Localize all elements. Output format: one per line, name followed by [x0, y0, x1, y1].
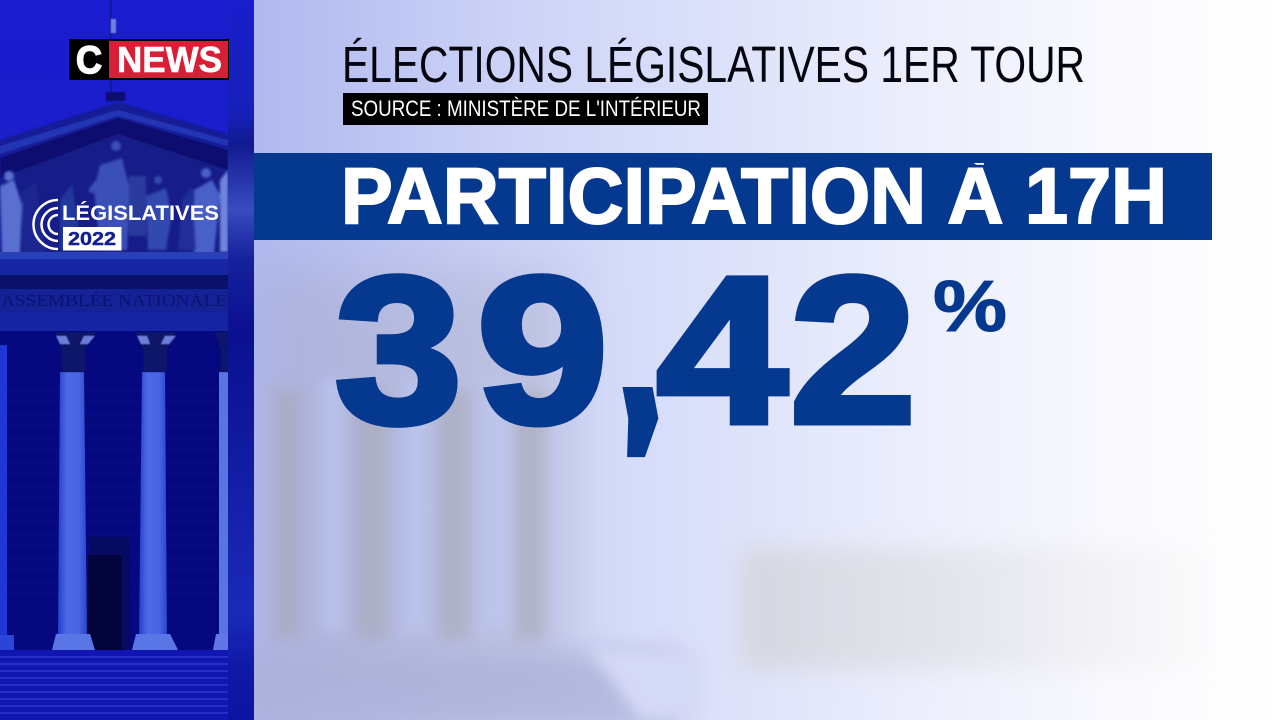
logo: Législatives 2022: LÉGISLATIVES [62, 200, 219, 225]
big number: 39,42 %: , [576, 232, 687, 478]
logo: Législatives 2022 [34, 200, 219, 250]
steps [0, 650, 228, 720]
pediment sculptures [0, 141, 228, 254]
logo: CNEWS: C [76, 39, 102, 82]
icon: concentric arcs [34, 200, 58, 249]
big number: 39,42 %: 3 [335, 235, 462, 467]
pediment [0, 102, 228, 258]
panel: Assemblée nationale photo [0, 0, 228, 720]
title: ÉLECTIONS LÉGISLATIVES 1ER TOUR [342, 36, 1085, 93]
source label [343, 93, 708, 125]
columns [0, 332, 228, 650]
big number: 39,42 %: 4 [657, 235, 787, 467]
big number: 39,42 %: 9 [477, 235, 608, 467]
wall [0, 331, 228, 650]
source label: SOURCE : MINISTÈRE DE L'INTÉRIEUR [351, 96, 701, 121]
big number: 39,42 %: 2 [790, 235, 916, 467]
heading band: participation: PARTICIPATION À 17H [341, 151, 1167, 240]
inscription: ASSEMBLÉE NATIONALE [1, 291, 227, 310]
logo: CNEWS: NEWS [117, 39, 222, 80]
big number: 39,42 % [335, 232, 1007, 478]
entablature [0, 252, 228, 331]
big number: 39,42 %: % [933, 267, 1007, 347]
icon: flag on the roof [106, 0, 125, 101]
logo: Législatives 2022: 2022 [68, 229, 116, 249]
door [88, 537, 130, 650]
panel: blurred strip beside photo [228, 0, 254, 720]
logo: CNEWS [69, 39, 229, 82]
